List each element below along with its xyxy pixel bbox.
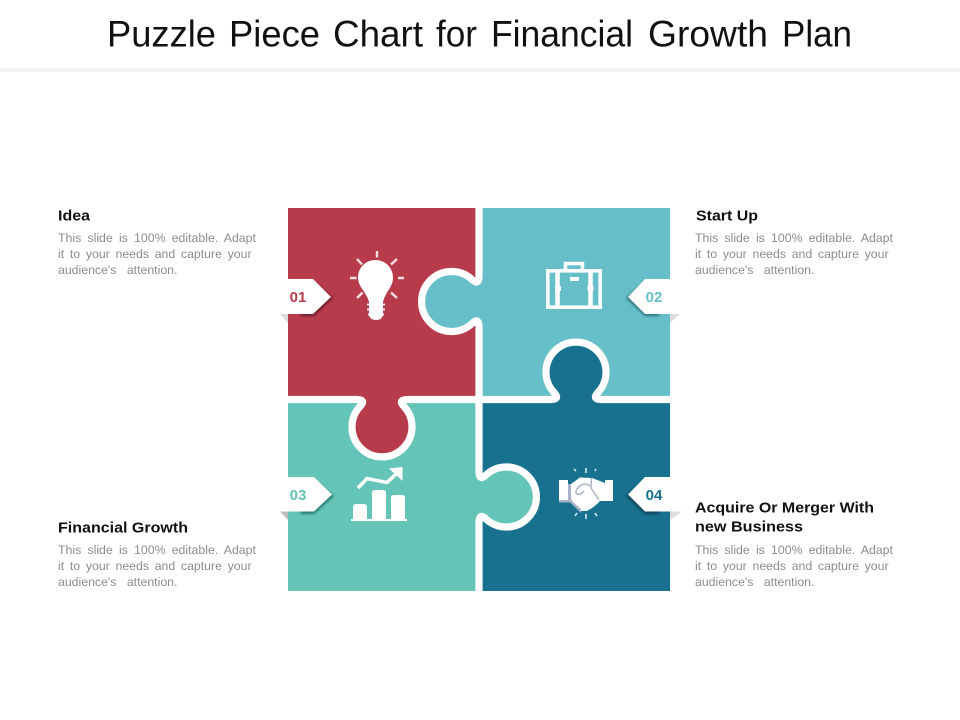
text block: Financial Growth: audience's attention. — [58, 575, 177, 589]
title — [107, 14, 852, 54]
text block: Idea — [58, 208, 256, 277]
text block: Acquire Or Merger: Acquire Or Merger With — [695, 500, 874, 516]
title: Puzzle — [107, 14, 216, 54]
tag 02: 02 — [646, 289, 662, 306]
text block: Acquire Or Merger: audience's attention. — [695, 575, 814, 589]
text block: Acquire Or Merger: new Business — [695, 518, 803, 536]
tag 03 — [280, 477, 334, 520]
tag 04 — [626, 477, 682, 520]
title: Plan — [782, 14, 852, 54]
piece 3: green — [288, 400, 479, 591]
text block: Acquire Or Merger — [695, 500, 893, 589]
icon: growth chart — [351, 467, 407, 521]
piece 4: dark blue — [479, 400, 670, 591]
tag 02 — [626, 279, 680, 323]
tab: green into dark blue — [479, 467, 536, 527]
tab: dark blue into light blue — [546, 342, 606, 400]
tag 04: 04 — [646, 487, 663, 504]
title: for — [436, 14, 477, 54]
text block: Idea: it to your needs and capture your — [58, 247, 252, 261]
title: Chart — [333, 14, 424, 54]
title: Growth — [648, 14, 768, 54]
title: Financial — [491, 14, 633, 54]
puzzle chart — [288, 208, 670, 591]
text block: Financial Growth: Financial Growth — [58, 520, 188, 536]
text block: Idea: Idea — [58, 208, 91, 224]
tag 03: 03 — [290, 487, 306, 504]
title: Piece — [229, 14, 320, 54]
text block: Financial Growth: it to your needs and capture your — [58, 559, 252, 573]
text block: Start Up: This slide is 100% editable. Adapt — [695, 231, 893, 245]
tag 01 — [280, 279, 333, 323]
text block: Idea: audience's attention. — [58, 263, 177, 277]
text block: Financial Growth: This slide is 100% editable. Adapt — [58, 543, 256, 557]
tab: red into green — [352, 399, 412, 457]
text block: Start Up: it to your needs and capture your — [695, 247, 889, 261]
tab: light blue into red — [422, 272, 479, 332]
piece 1: red — [288, 208, 479, 400]
text block: Idea: This slide is 100% editable. Adapt — [58, 231, 256, 245]
white seams — [288, 208, 670, 591]
text block: Acquire Or Merger: it to your needs and capture your — [695, 559, 889, 573]
icon: handshake — [559, 468, 613, 519]
text block: Start Up: audience's attention. — [695, 263, 814, 277]
tag 01: 01 — [290, 289, 306, 306]
text block: Start Up — [695, 208, 893, 277]
piece 2: light blue — [479, 208, 670, 400]
text block: Start Up: Start Up — [696, 208, 758, 224]
text block: Financial Growth — [58, 520, 256, 589]
icon: light bulb — [350, 251, 404, 320]
icon: briefcase — [548, 264, 600, 308]
text block: Acquire Or Merger: This slide is 100% editable. Adapt — [695, 543, 893, 557]
